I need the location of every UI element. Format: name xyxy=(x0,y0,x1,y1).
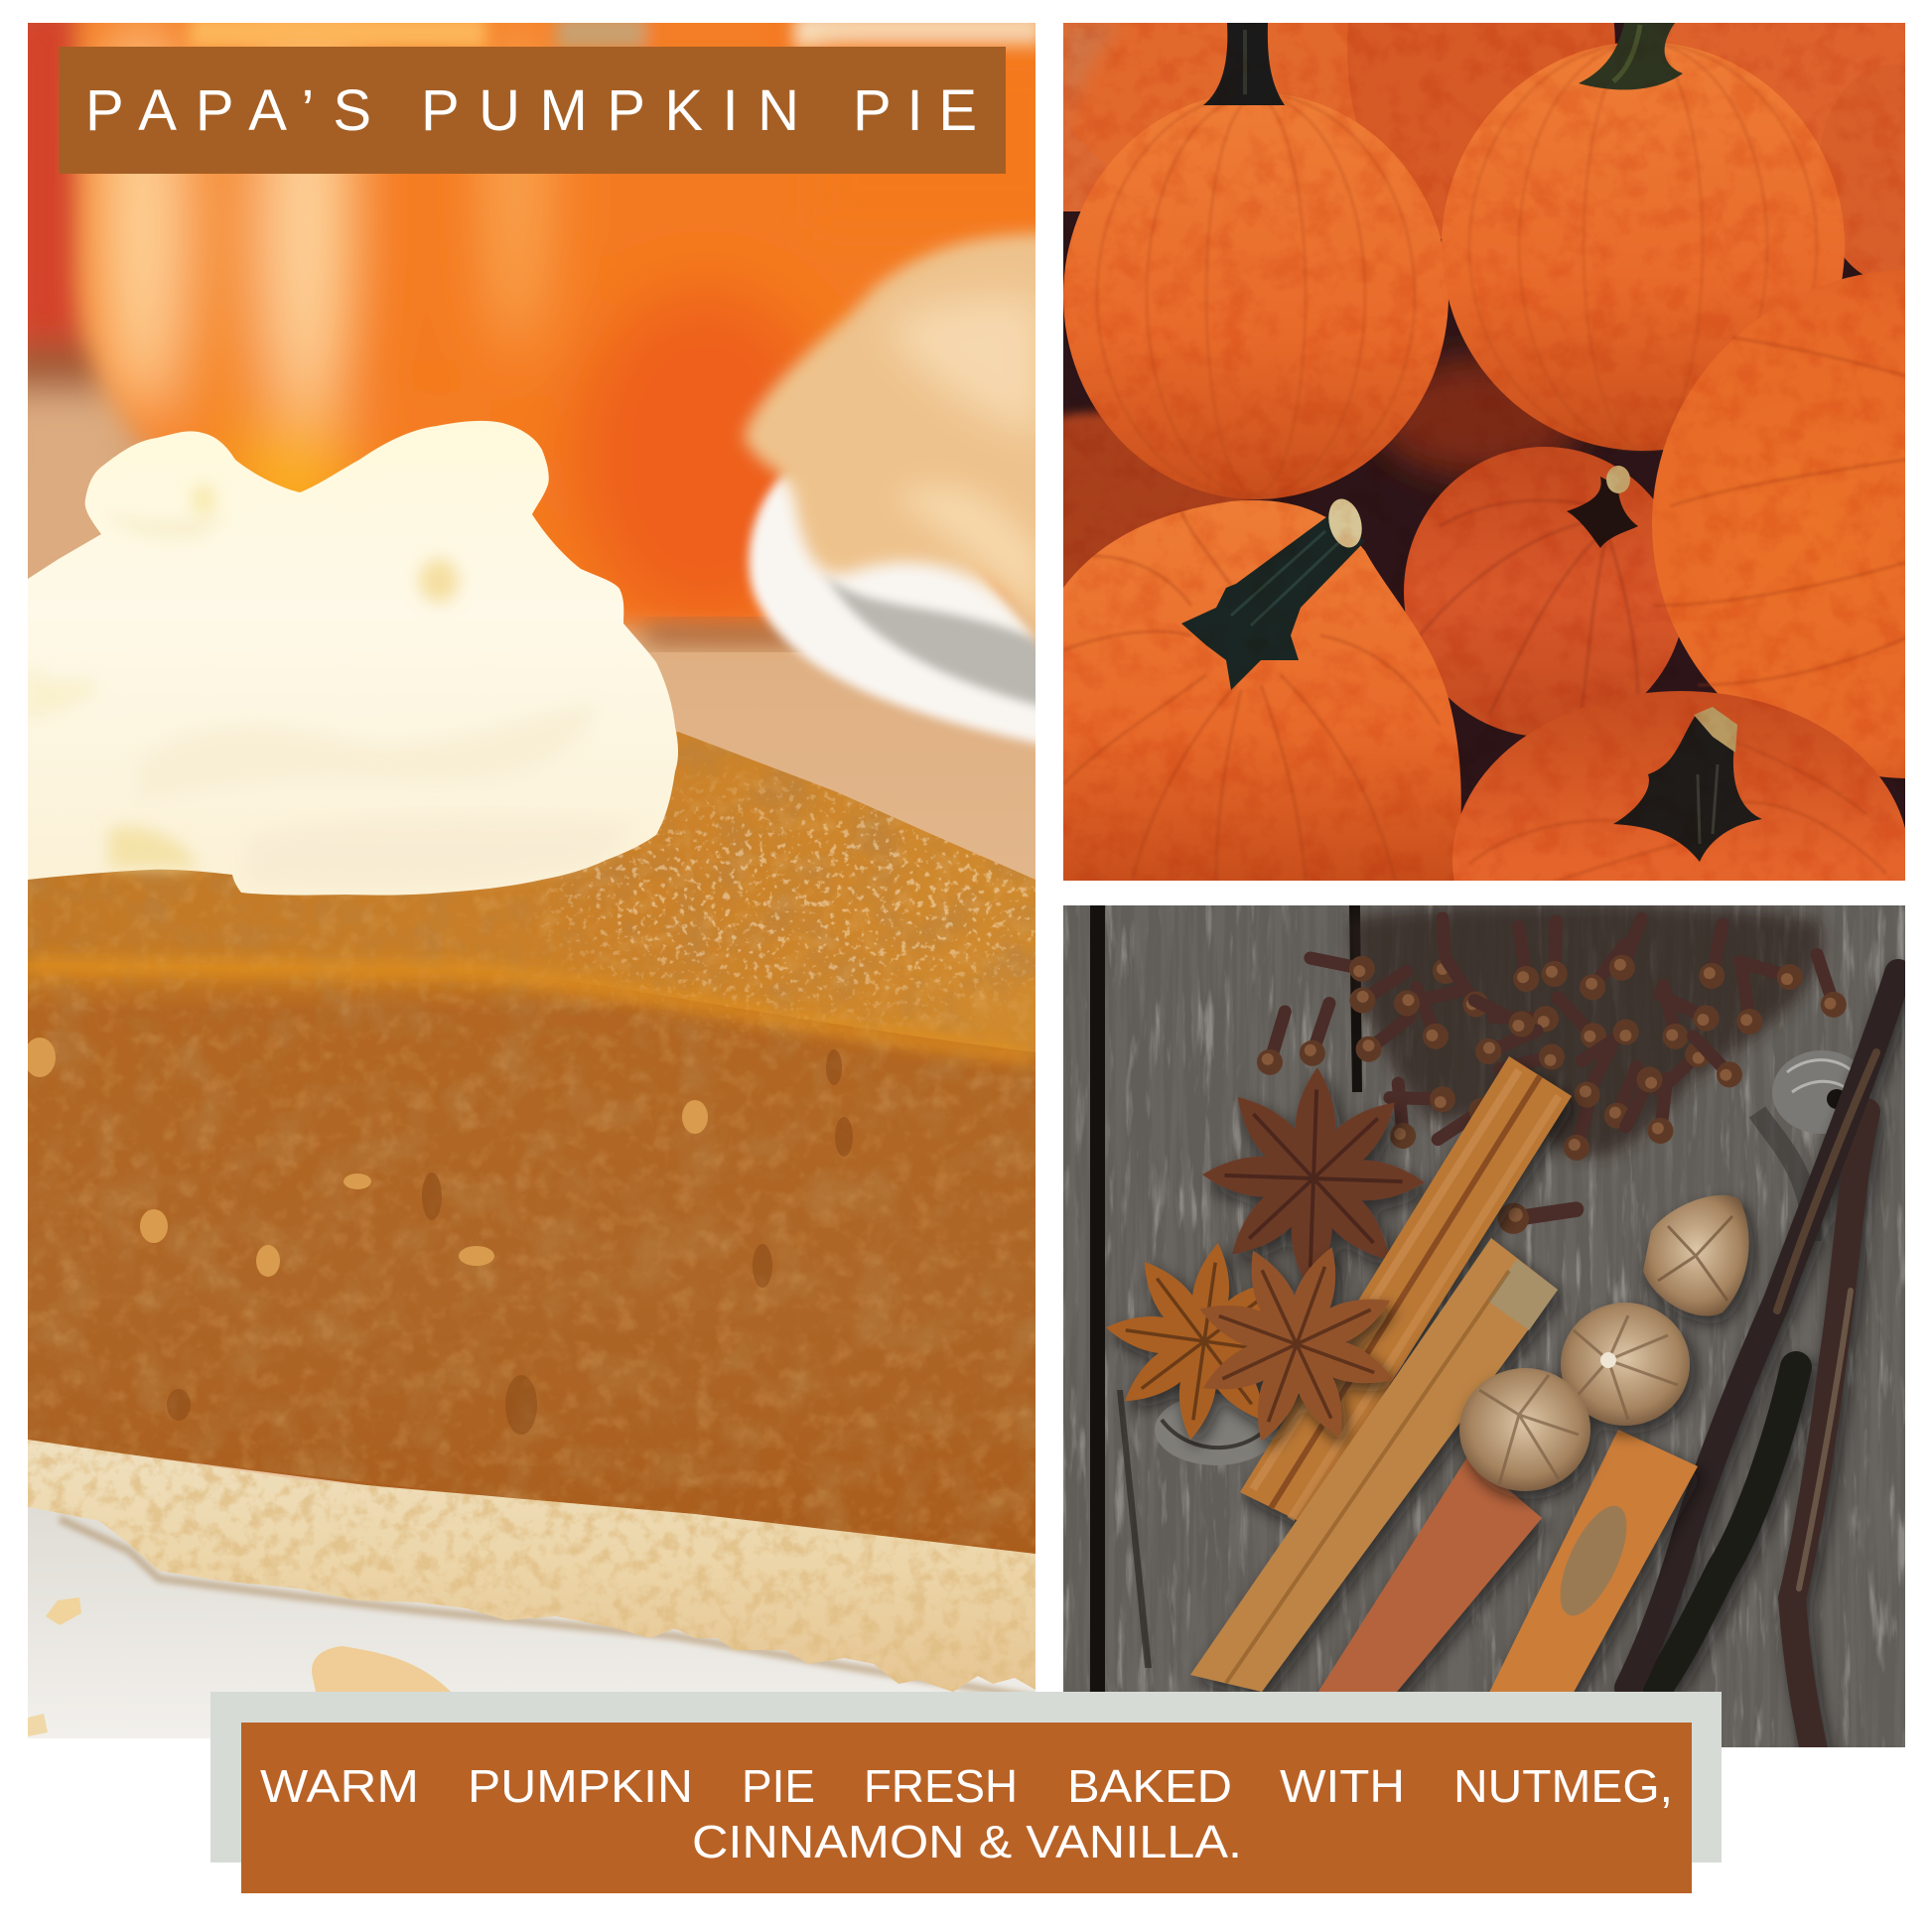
photo: pumpkin pie slice with whipped cream xyxy=(28,23,1035,1738)
title text: PIE xyxy=(853,78,977,143)
pumpkins in the back row xyxy=(1049,0,1932,283)
table background xyxy=(28,23,1035,1738)
caption bar xyxy=(241,1723,1692,1893)
cloves xyxy=(1253,903,1850,1235)
vanilla beans xyxy=(1628,973,1898,1755)
shadowed orange behind the pile xyxy=(953,357,1584,601)
caption text: BAKED xyxy=(1067,1760,1232,1812)
pumpkin: large right xyxy=(1652,270,1932,778)
wood background xyxy=(1063,905,1905,1747)
anise star: upper xyxy=(1198,1063,1429,1294)
pie filling side xyxy=(28,963,1035,1561)
cream shading xyxy=(28,483,635,884)
photo: spices on weathered wood xyxy=(1063,903,1905,1757)
wood plank gaps xyxy=(1090,905,1362,1747)
crust xyxy=(28,1440,1035,1698)
pumpkin: bottom right xyxy=(1452,691,1909,1029)
stem: top left pumpkin xyxy=(1203,23,1285,105)
dark table shadow xyxy=(645,623,814,645)
caption text: NUTMEG, xyxy=(1453,1760,1673,1812)
cinnamon stick: long middle xyxy=(1190,1238,1558,1692)
caption background panel xyxy=(210,1692,1722,1863)
pumpkin: bottom left xyxy=(1063,500,1461,881)
caption text: CINNAMON & VANILLA. xyxy=(692,1816,1242,1867)
stem: middle lower pumpkin xyxy=(1567,466,1638,548)
nutmegs xyxy=(1459,1195,1749,1491)
blurred background pumpkin xyxy=(62,23,1035,647)
photo: pile of orange pumpkins xyxy=(953,0,1932,1029)
blurred pie on spoon xyxy=(744,233,1052,655)
pie texture xyxy=(24,732,1035,1566)
blurred red pumpkin corner xyxy=(28,23,127,543)
stem: bottom right pumpkin xyxy=(1613,707,1762,862)
pumpkin: middle lower xyxy=(1404,447,1686,737)
dark gaps between pumpkins xyxy=(1063,23,1905,881)
caption text: WARM xyxy=(260,1760,419,1812)
anise stars: lower pair xyxy=(1092,1212,1429,1476)
pie top surface xyxy=(28,732,1035,1056)
strip of pumpkin colours above the title bar xyxy=(189,15,1042,50)
pumpkin: large top left xyxy=(1063,92,1449,499)
cinnamon stick: reddish xyxy=(1277,1455,1542,1757)
caption text: PUMPKIN xyxy=(468,1760,693,1812)
spoon xyxy=(749,467,1052,747)
plate xyxy=(0,1489,1035,1747)
wood knots xyxy=(1155,1050,1871,1465)
pumpkin: large top right xyxy=(1442,42,1845,451)
crumbs xyxy=(28,1597,451,1736)
stem: top right pumpkin xyxy=(1579,23,1683,89)
stem: bottom left pumpkin xyxy=(1181,495,1367,690)
caption text: FRESH xyxy=(864,1760,1018,1812)
title banner xyxy=(59,47,1006,174)
caption text: PIE xyxy=(742,1760,815,1812)
title text: PUMPKIN xyxy=(421,78,799,143)
cinnamon stick: right xyxy=(1457,1430,1698,1757)
pumpkin skin texture xyxy=(1063,23,1905,881)
top-right pumpkin tint xyxy=(814,50,1072,228)
title text: PAPA’S xyxy=(85,78,371,143)
cinnamon stick: upper xyxy=(1240,1056,1572,1523)
whipped cream xyxy=(28,421,678,896)
caption text: WITH xyxy=(1280,1760,1405,1812)
